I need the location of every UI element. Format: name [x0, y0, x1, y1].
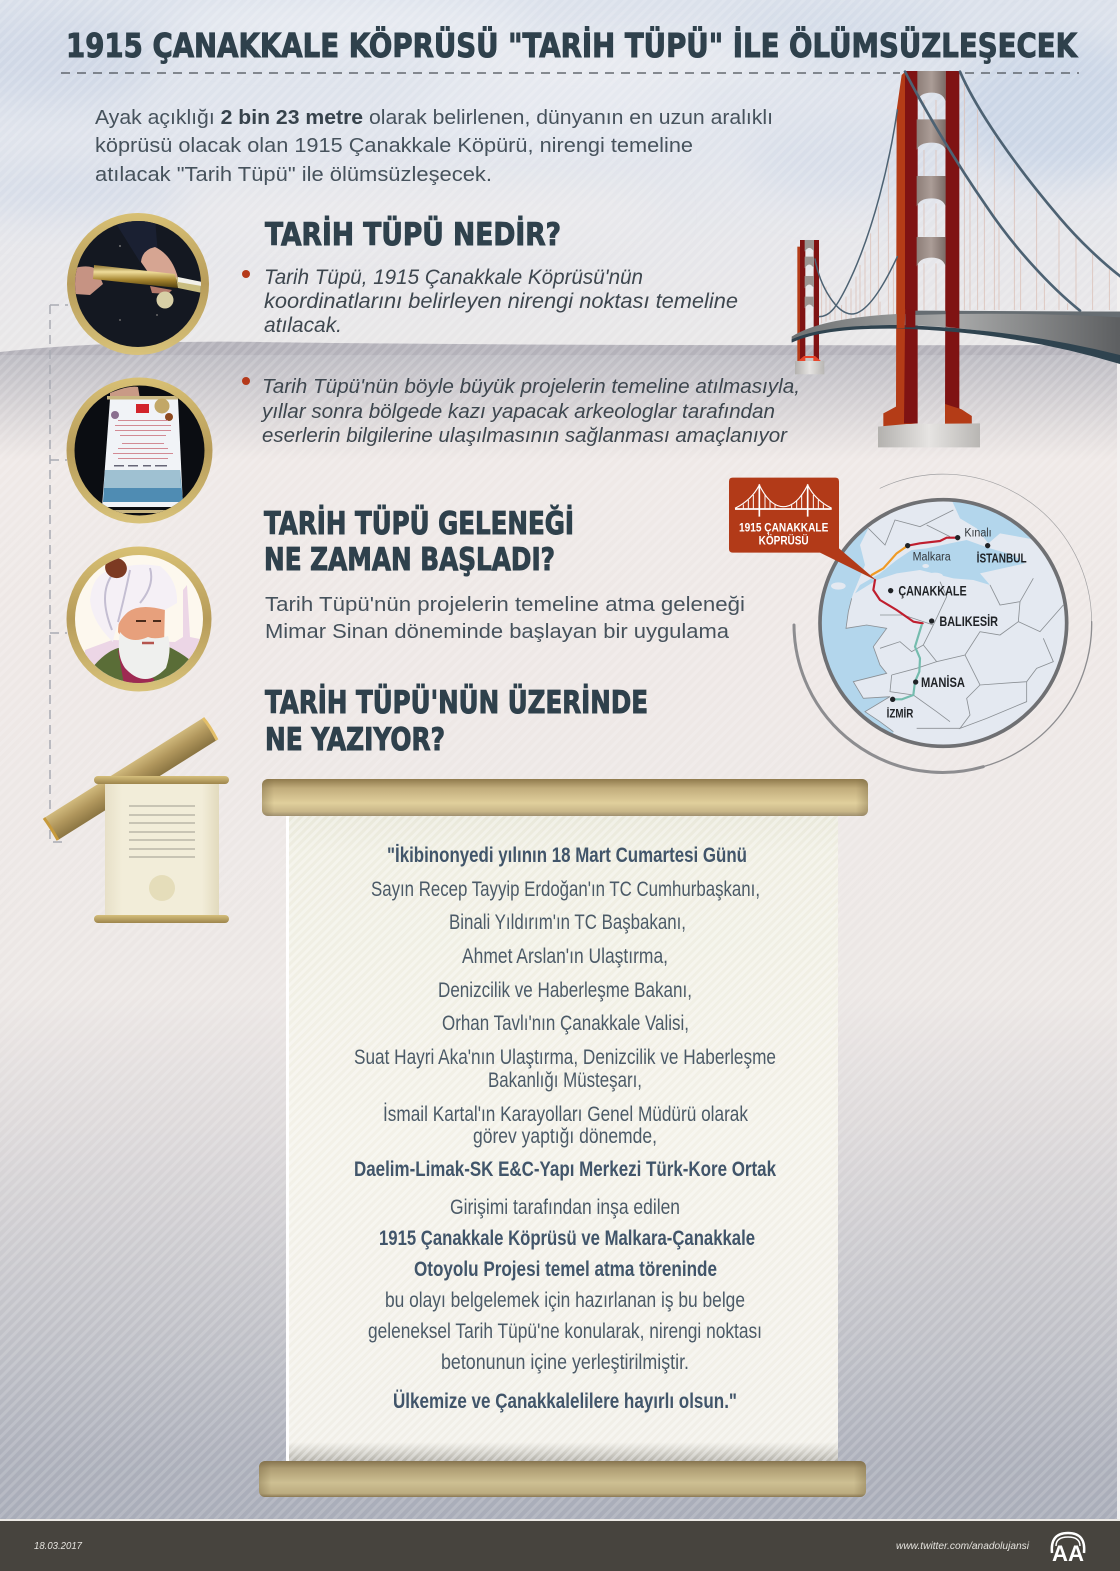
bullet text 2: yıllar sonra bölgede kazı yapacak arkeologlar tarafından — [260, 400, 775, 423]
tradition text: Mimar Sinan döneminde başlayan bir uygulama — [265, 621, 730, 643]
scroll inscription: 1915 Çanakkale Köprüsü ve Malkara-Çanakkale — [379, 1227, 755, 1250]
city labels: İZMİR — [887, 706, 914, 721]
bullet text 1 — [242, 266, 738, 337]
suspender cables — [822, 83, 1109, 323]
city labels: İSTANBUL — [977, 551, 1027, 566]
intro text: köprüsü olacak olan 1915 Çanakkale Köpürü, nirengi temeline — [95, 135, 693, 157]
scroll inscription: betonunun içine yerleştirilmiştir. — [441, 1351, 689, 1374]
scroll inscription: Daelim-Limak-SK E&C-Yapı Merkezi Türk-Kore Ortak — [354, 1158, 776, 1181]
tradition text — [265, 594, 745, 643]
bullet text 2: Tarih Tüpü'nün böyle büyük projelerin temeline atılmasıyla, — [262, 375, 800, 398]
scroll inscription: "İkibinonyedi yılının 18 Mart Cumartesi Günü — [387, 844, 747, 867]
scroll inscription: Otoyolu Projesi temel atma töreninde — [414, 1258, 717, 1281]
heading: when did it begin — [264, 505, 574, 578]
bullet text 1: atılacak. — [264, 314, 342, 337]
bottom roller — [259, 1461, 866, 1497]
scroll inscription: Ahmet Arslan'ın Ulaştırma, — [462, 945, 668, 968]
scroll inscription — [354, 844, 776, 1413]
map — [729, 474, 1092, 772]
heading: when did it begin: TARİH TÜPÜ GELENEĞİ — [264, 505, 574, 542]
scroll inscription: geleneksel Tarih Tüpü'ne konularak, nirengi noktası — [368, 1320, 762, 1343]
scroll inscription: Ülkemize ve Çanakkalelilere hayırlı olsun." — [393, 1390, 737, 1413]
city labels: ÇANAKKALE — [898, 583, 967, 599]
dashed connector — [50, 305, 68, 842]
scroll inscription: Suat Hayri Aka'nın Ulaştırma, Denizcilik ve Haberleşme — [354, 1046, 776, 1069]
heading: what is written: TARİH TÜPÜ'NÜN ÜZERİNDE — [265, 684, 648, 721]
scroll paper — [286, 814, 838, 1465]
bullet text 2: eserlerin bilgilerine ulaşılmasının sağlanması amaçlanıyor — [262, 424, 788, 447]
scroll inscription: Denizcilik ve Haberleşme Bakanı, — [438, 979, 692, 1002]
intro text: atılacak "Tarih Tüpü" ile ölümsüzleşecek. — [95, 164, 492, 186]
bullet text 1: koordinatlarını belirleyen nirengi noktası temeline — [264, 290, 738, 313]
small tower — [795, 240, 824, 374]
heading: what is written: NE YAZIYOR? — [265, 722, 445, 758]
intro text — [95, 107, 773, 186]
scroll inscription: Bakanlığı Müsteşarı, — [488, 1069, 642, 1092]
top roller — [262, 779, 868, 816]
photo: history tube in hands — [67, 213, 210, 355]
callout: bridge location: KÖPRÜSÜ — [759, 532, 809, 547]
icon: Anadolu Agency logo: AA — [1052, 1541, 1084, 1566]
city labels: Malkara — [913, 549, 951, 563]
heading: what is it: TARİH TÜPÜ NEDİR? — [265, 216, 561, 253]
scroll inscription: Binali Yıldırım'ın TC Başbakanı, — [449, 911, 686, 934]
intro text: Ayak açıklığı 2 bin 23 metre olarak belirlenen, dünyanın en uzun aralıklı — [95, 107, 773, 129]
heading: what is written — [265, 684, 648, 758]
scroll inscription: bu olayı belgelemek için hazırlanan iş bu belge — [385, 1289, 745, 1312]
scroll inscription: Sayın Recep Tayyip Erdoğan'ın TC Cumhurbaşkanı, — [371, 878, 760, 901]
bridge illustration — [792, 71, 1120, 447]
scroll inscription: Girişimi tarafından inşa edilen — [450, 1196, 680, 1219]
outer ring — [794, 474, 1092, 772]
callout: bridge location — [729, 478, 877, 581]
footer bar: 18.03.2017 — [34, 1541, 82, 1552]
bullet text 1: Tarih Tüpü, 1915 Çanakkale Köprüsü'nün — [264, 266, 643, 289]
photo: document scroll — [66, 378, 212, 524]
scroll panel — [259, 779, 868, 1497]
scroll inscription: görev yaptığı dönemde, — [473, 1125, 657, 1148]
tradition text: Tarih Tüpü'nün projelerin temeline atma geleneği — [265, 594, 745, 616]
motorway routes — [872, 538, 958, 699]
footer bar — [0, 1521, 1120, 1571]
heading: when did it begin: NE ZAMAN BAŞLADI? — [264, 542, 555, 578]
city labels: BALIKESİR — [939, 613, 998, 629]
city labels: Kınalı — [964, 526, 992, 540]
bullet text 2 — [242, 375, 800, 447]
bridge deck — [792, 309, 1120, 364]
city labels: MANİSA — [921, 674, 965, 690]
scroll inscription: Orhan Tavlı'nın Çanakkale Valisi, — [442, 1012, 689, 1035]
city labels — [887, 526, 1027, 721]
map disc — [818, 498, 1068, 748]
scroll inscription: İsmail Kartal'ın Karayolları Genel Müdürü olarak — [383, 1103, 748, 1126]
footer bar: www.twitter.com/anadolujansi — [896, 1541, 1030, 1552]
icon: small scroll — [44, 718, 229, 923]
callout: bridge location: 1915 ÇANAKKALE — [739, 520, 828, 534]
main cables — [815, 72, 1120, 317]
main tower legs — [878, 71, 980, 447]
photo: Mimar Sinan portrait — [66, 546, 212, 692]
